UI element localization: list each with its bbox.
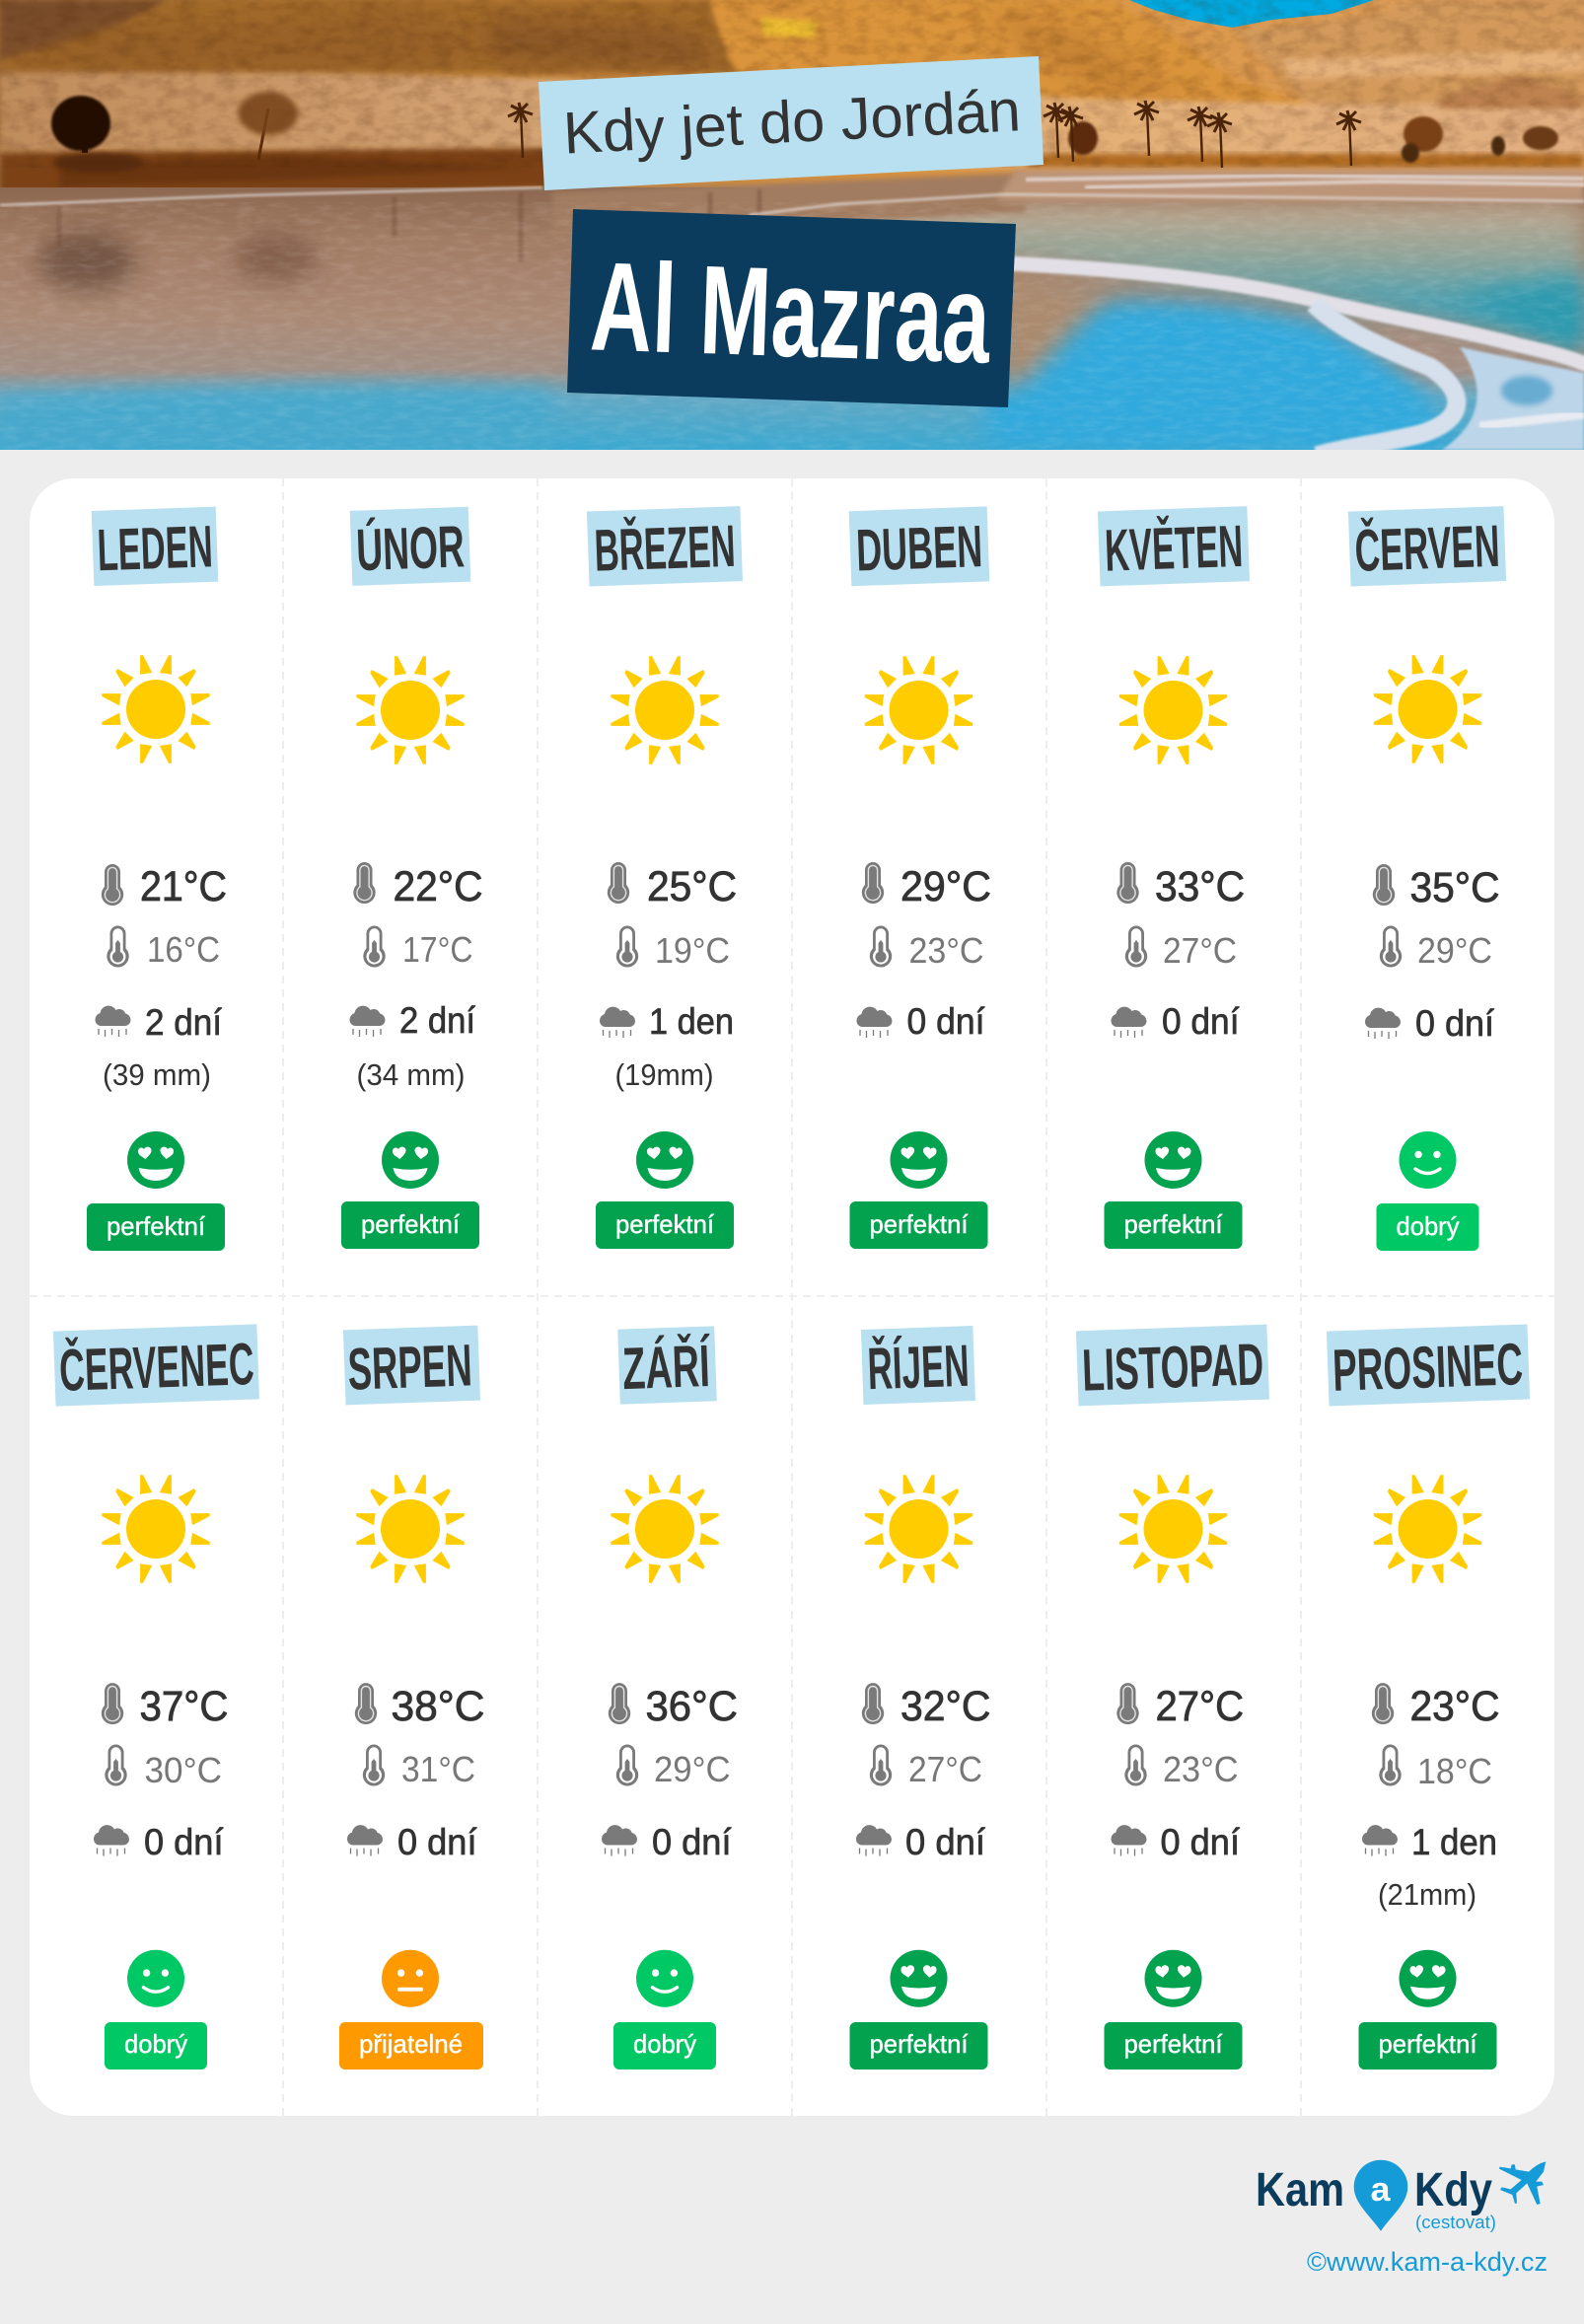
rating: dobrý: dobrý — [1397, 1211, 1460, 1241]
rating: perfektní — [87, 1131, 225, 1251]
panel: monthly climate card — [30, 478, 1554, 2116]
rain days — [347, 1822, 477, 1862]
high temperature — [862, 862, 991, 910]
month: červenec — [53, 1324, 259, 2070]
salt lines — [0, 187, 542, 205]
low temperature — [870, 1744, 982, 1789]
rating: perfektní — [850, 1950, 988, 2070]
month: srpen — [339, 1326, 485, 2070]
month label — [53, 1324, 259, 1407]
month label: ŘÍJEN — [866, 1333, 971, 1402]
rain days — [856, 1001, 985, 1042]
low temperature — [363, 925, 473, 970]
high temperature: 33°C — [1155, 863, 1245, 910]
water — [0, 187, 1584, 450]
icon: sun — [356, 656, 465, 764]
icon: sun — [865, 656, 972, 764]
icon: sun — [356, 1475, 465, 1583]
logo: Kam a Kdy: Kam — [1256, 2164, 1344, 2216]
month: prosinec — [1327, 1324, 1530, 2070]
rating: přijatelné: přijatelné — [359, 2029, 463, 2059]
low temperature — [363, 1744, 475, 1789]
high temperature — [608, 862, 737, 910]
rain days: 2 dní — [399, 1000, 476, 1041]
month: září — [602, 1326, 738, 2070]
rating: perfektní — [596, 1131, 734, 1249]
logo: Kam a Kdy — [1256, 2160, 1546, 2232]
month label — [849, 506, 989, 586]
month: květen — [1098, 506, 1250, 1249]
icon: sun — [102, 655, 210, 763]
high temperature: 35°C — [1410, 864, 1499, 911]
rating: dobrý: dobrý — [124, 2029, 187, 2059]
rain days: 2 dní — [145, 1002, 223, 1043]
month: červen — [1348, 506, 1506, 1251]
rain days — [1111, 1822, 1241, 1862]
precipitation: (21mm) — [1378, 1877, 1476, 1912]
month label: SRPEN — [346, 1332, 473, 1403]
low temperature — [616, 1744, 730, 1789]
month: březen — [587, 506, 743, 1249]
rain days: 1 den — [649, 1001, 734, 1042]
rain days: 0 dní — [144, 1822, 224, 1862]
high temperature: 37°C — [140, 1683, 229, 1730]
high temperature: 21°C — [140, 863, 227, 910]
low temperature: 29°C — [1417, 930, 1492, 971]
low temperature: 29°C — [654, 1749, 730, 1789]
rain days: 0 dní — [1162, 1001, 1240, 1042]
month: listopad — [1076, 1325, 1269, 2070]
high temperature — [862, 1683, 990, 1730]
low temperature — [616, 925, 730, 971]
low temperature — [107, 925, 220, 970]
icon: map pin — [1354, 2160, 1407, 2231]
high temperature: 23°C — [1410, 1683, 1499, 1730]
month label — [617, 1326, 717, 1405]
rating: perfektní — [850, 1131, 988, 1249]
high temperature — [1373, 864, 1499, 911]
month label — [861, 1326, 975, 1405]
rain days: 1 den — [1411, 1822, 1497, 1862]
rating: dobrý — [105, 1950, 207, 2070]
low temperature — [105, 1744, 222, 1790]
low temperature: 30°C — [144, 1750, 222, 1790]
month: říjen — [850, 1326, 990, 2070]
title tag: Al Mazraa — [567, 209, 1016, 407]
precipitation: (34 mm) — [357, 1057, 466, 1092]
month label: ZÁŘÍ — [621, 1333, 712, 1402]
trees and palms — [51, 92, 1558, 173]
month label — [350, 507, 470, 586]
rating: dobrý — [613, 1950, 716, 2070]
rating: dobrý — [1377, 1131, 1479, 1251]
month label — [1076, 1325, 1269, 1406]
heading tag: Kdy jet do Jordán — [539, 56, 1044, 190]
low temperature: 31°C — [401, 1749, 475, 1789]
rating: perfektní: perfektní — [870, 2029, 969, 2059]
high temperature — [102, 1683, 229, 1730]
month label — [343, 1326, 480, 1405]
month label: LEDEN — [96, 513, 214, 583]
rain days — [1111, 1001, 1240, 1042]
title tag: Al Mazraa: Al Mazraa — [589, 236, 993, 391]
rating: perfektní: perfektní — [615, 1209, 715, 1239]
logo: Kam a Kdy: Kdy — [1414, 2164, 1492, 2216]
low temperature: 16°C — [147, 929, 220, 970]
month: únor — [341, 507, 483, 1249]
high temperature: 38°C — [391, 1683, 485, 1730]
high temperature: 27°C — [1156, 1683, 1244, 1730]
icon: airplane — [1499, 2161, 1546, 2205]
low temperature — [1379, 1744, 1492, 1791]
rain days — [94, 1822, 224, 1862]
icon: sun — [611, 1475, 719, 1583]
low temperature — [1125, 925, 1237, 971]
rating: perfektní — [1105, 1131, 1243, 1249]
month label: DUBEN — [855, 513, 983, 584]
month: duben — [849, 506, 991, 1249]
high temperature: 25°C — [647, 863, 737, 910]
high temperature: 36°C — [645, 1683, 738, 1730]
rain days — [600, 1001, 734, 1042]
rain days: 0 dní — [397, 1822, 477, 1862]
rain days — [602, 1822, 732, 1862]
month label — [1098, 506, 1250, 586]
rating: perfektní: perfektní — [107, 1211, 206, 1241]
low temperature: 27°C — [908, 1749, 982, 1789]
rating: perfektní — [341, 1131, 479, 1249]
high temperature — [1372, 1683, 1499, 1730]
icon: sun — [1374, 1475, 1481, 1583]
high temperature: 29°C — [900, 863, 991, 910]
icon: sun — [1119, 656, 1227, 764]
logo: Kam a Kdy: a — [1371, 2171, 1392, 2209]
low temperature: 18°C — [1417, 1751, 1492, 1791]
month label: LISTOPAD — [1081, 1331, 1264, 1404]
low temperature: 23°C — [1163, 1749, 1239, 1789]
high temperature — [1116, 1683, 1244, 1730]
icon: sun — [611, 656, 719, 764]
month label: ÚNOR — [355, 513, 466, 583]
low temperature: 19°C — [655, 930, 730, 971]
low temperature: 27°C — [1163, 930, 1237, 971]
rain days: 0 dní — [905, 1822, 986, 1862]
high temperature: 22°C — [393, 863, 483, 910]
rating: perfektní: perfektní — [1124, 2029, 1223, 2059]
logo: Kam a Kdy: (cestovat) — [1415, 2213, 1496, 2232]
hero photo: Dead Sea landscape — [0, 0, 1584, 456]
month label: BŘEZEN — [593, 513, 737, 584]
month label: ČERVENEC — [58, 1331, 255, 1404]
high temperature: 32°C — [900, 1683, 990, 1730]
low temperature: 23°C — [909, 930, 984, 971]
low temperature — [1380, 925, 1492, 971]
rain days — [1362, 1822, 1497, 1862]
high temperature — [353, 862, 483, 910]
month label — [92, 507, 218, 586]
high temperature — [102, 863, 227, 910]
icon: sun — [865, 1475, 972, 1583]
rain days — [1365, 1003, 1495, 1044]
heading tag: Kdy jet do Jordán: Kdy jet do Jordán — [562, 77, 1022, 167]
rain days — [95, 1002, 223, 1043]
rain days — [856, 1822, 986, 1862]
precipitation: (39 mm) — [103, 1057, 211, 1092]
rating: perfektní — [1105, 1950, 1243, 2070]
high temperature — [609, 1683, 738, 1730]
low temperature — [1124, 1744, 1239, 1789]
rain days: 0 dní — [907, 1001, 985, 1042]
icon: sun — [102, 1475, 210, 1583]
high temperature — [1116, 862, 1245, 910]
month label — [587, 506, 743, 586]
low temperature — [870, 925, 984, 971]
rating: perfektní — [1359, 1950, 1497, 2070]
rain days: 0 dní — [1160, 1822, 1241, 1862]
rating: perfektní: perfektní — [870, 1209, 969, 1239]
rain days: 0 dní — [652, 1822, 732, 1862]
rating: přijatelné — [339, 1950, 483, 2070]
rating: perfektní: perfektní — [361, 1209, 461, 1239]
month label: KVĚTEN — [1104, 513, 1244, 584]
low temperature: 17°C — [402, 929, 473, 970]
month label — [1348, 506, 1506, 587]
month: leden — [87, 507, 227, 1251]
rating: dobrý: dobrý — [633, 2029, 696, 2059]
rating: perfektní: perfektní — [1379, 2029, 1477, 2059]
rain days: 0 dní — [1415, 1003, 1495, 1044]
rain days — [349, 1000, 476, 1041]
website credit: ©www.kam-a-kdy.cz — [1307, 2247, 1548, 2277]
rating: perfektní: perfektní — [1124, 1209, 1223, 1239]
icon: sun — [1374, 655, 1481, 763]
icon: sun — [1119, 1475, 1227, 1583]
precipitation: (19mm) — [615, 1057, 714, 1092]
